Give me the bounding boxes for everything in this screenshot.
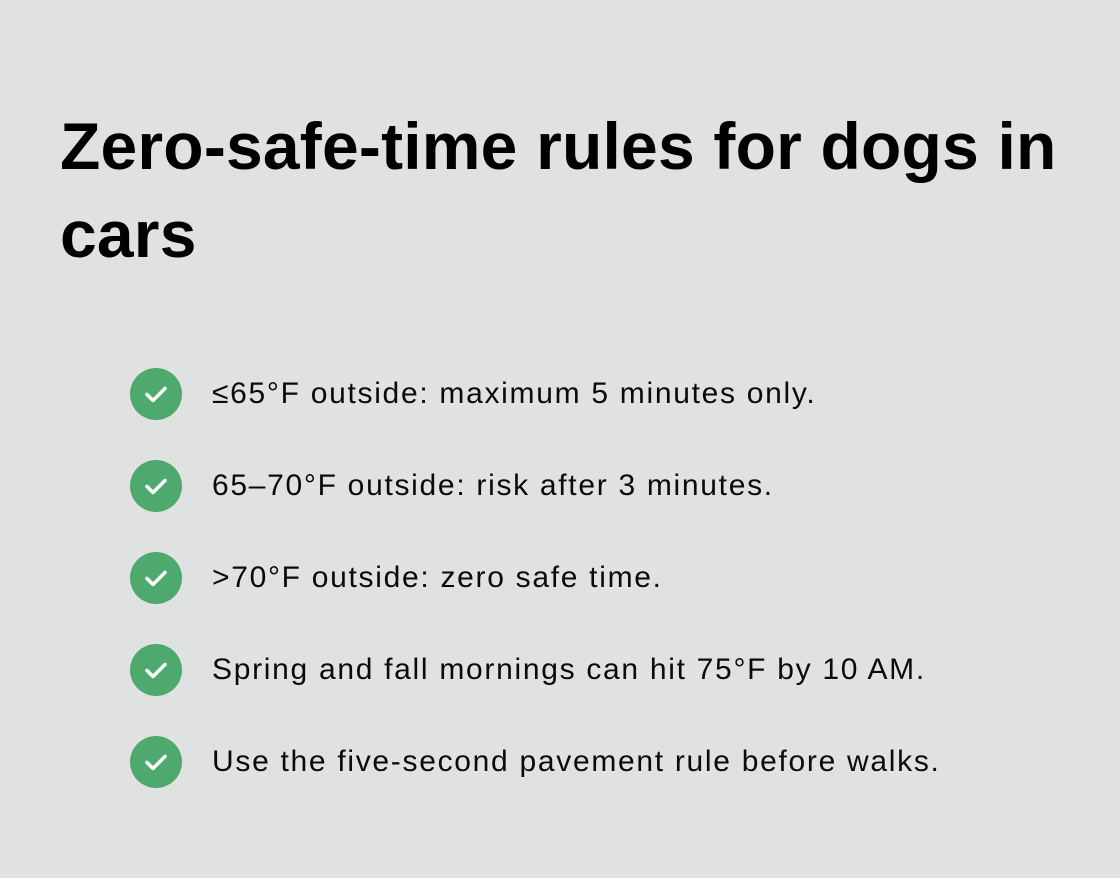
text: 65–70°F outside: risk after 3 minutes. <box>212 469 774 502</box>
icon: check <box>130 368 182 420</box>
list item 2 <box>130 460 774 512</box>
icon: check <box>130 552 182 604</box>
text: >70°F outside: zero safe time. <box>212 561 663 594</box>
text: Use the five-second pavement rule before walks. <box>212 745 941 778</box>
list item 3 <box>130 552 663 604</box>
list item 4 <box>130 644 926 696</box>
icon: check <box>130 644 182 696</box>
icon: check <box>130 736 182 788</box>
text: Spring and fall mornings can hit 75°F by 10 AM. <box>212 653 926 686</box>
icon: check <box>130 460 182 512</box>
list item 1 <box>130 368 816 420</box>
list item 5 <box>130 736 941 788</box>
text: ≤65°F outside: maximum 5 minutes only. <box>212 377 816 410</box>
title: Zero-safe-time rules for dogs in cars <box>60 109 1057 271</box>
